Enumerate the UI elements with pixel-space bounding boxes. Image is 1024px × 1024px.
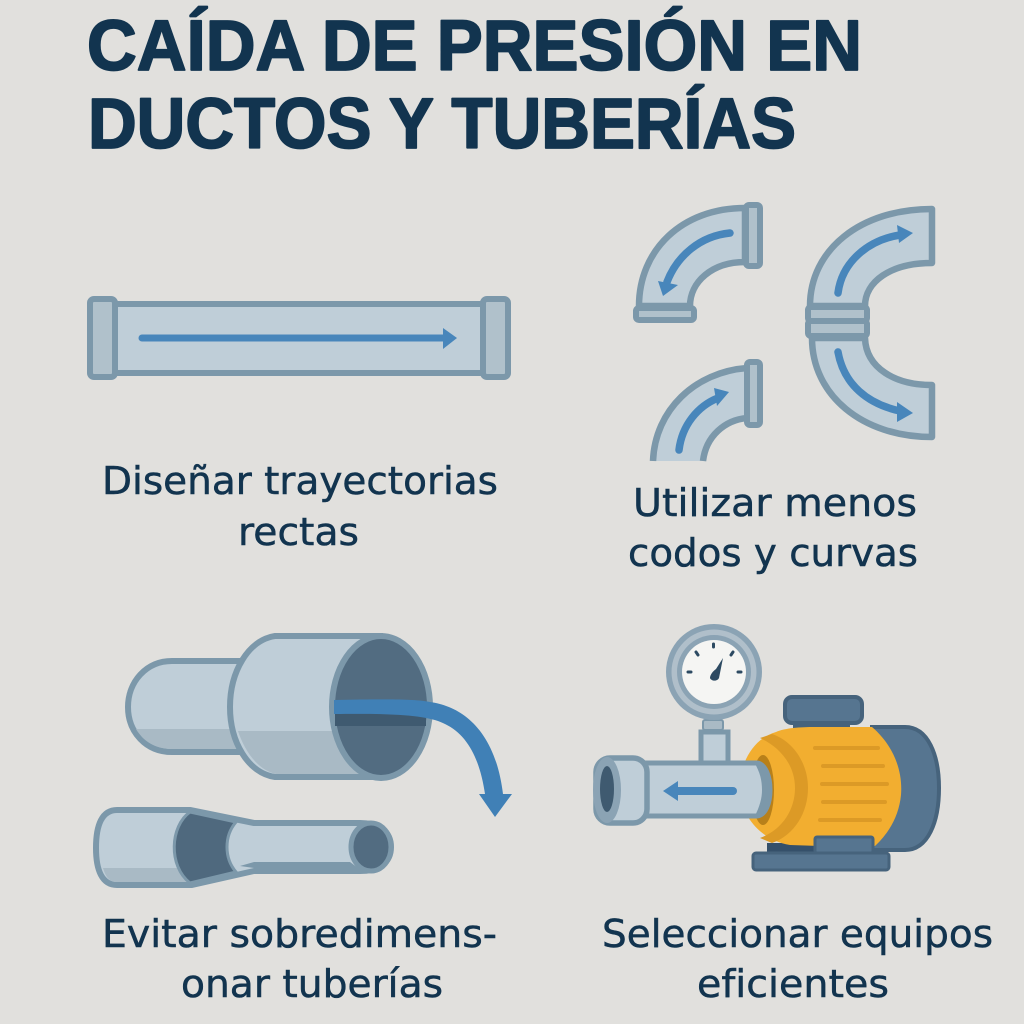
- title: CAÍDA DE PRESIÓN EN: [87, 7, 862, 86]
- arrow: straight flow: [142, 328, 457, 349]
- label: straight paths: [102, 459, 498, 554]
- icon: oversized pipe: [128, 636, 512, 817]
- label: efficient equipment: Seleccionar equipos: [602, 912, 993, 956]
- label: fewer elbows: [628, 481, 918, 575]
- icon: elbow bottom: [653, 362, 760, 461]
- label: fewer elbows: Utilizar menos: [633, 481, 917, 525]
- gauge: [666, 624, 762, 720]
- title: [87, 7, 862, 164]
- arrow: stream out of pipe: [334, 699, 512, 817]
- label: efficient equipment: [602, 912, 993, 1006]
- title: DUCTOS Y TUBERÍAS: [88, 85, 796, 164]
- label: straight paths: Diseñar trayectorias: [102, 459, 498, 503]
- label: efficient equipment: eficientes: [697, 962, 889, 1006]
- motor top box: [785, 697, 862, 730]
- icon: double elbow: [808, 209, 932, 437]
- gauge stem: [701, 720, 728, 765]
- motor body: [740, 727, 901, 853]
- arrow: pump flow: [663, 781, 733, 801]
- label: avoid oversizing: [102, 912, 497, 1006]
- label: avoid oversizing: Evitar sobredimens-: [102, 912, 497, 956]
- motor back cover: [872, 727, 939, 850]
- icon: reducer: [96, 810, 391, 885]
- icon: elbow top left: [636, 205, 760, 320]
- label: fewer elbows: codos y curvas: [628, 531, 918, 575]
- label: avoid oversizing: onar tuberías: [181, 962, 443, 1006]
- panel: straight pipe: [90, 299, 508, 377]
- pipe: [593, 757, 771, 823]
- label: straight paths: rectas: [238, 510, 359, 554]
- icon: pump with gauge: [593, 624, 939, 870]
- motor base: [753, 843, 889, 870]
